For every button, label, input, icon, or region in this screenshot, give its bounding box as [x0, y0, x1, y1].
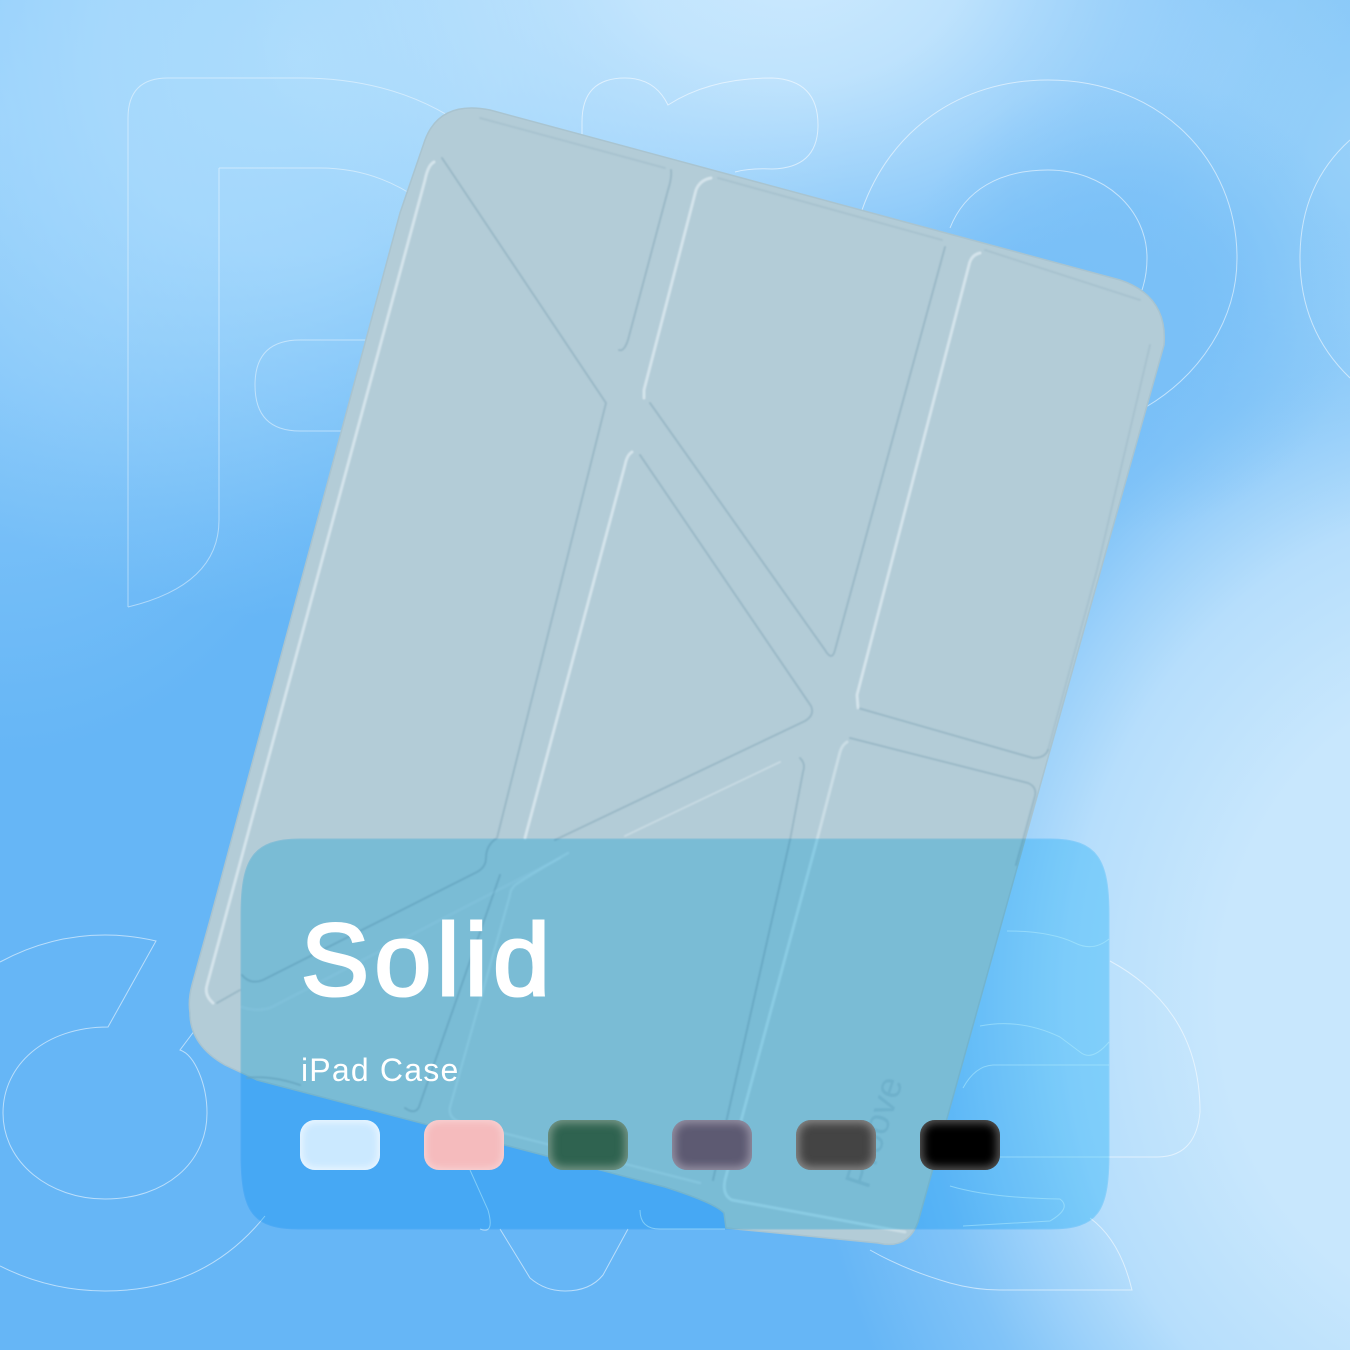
swatch: green [548, 1120, 628, 1170]
swatch: graphite [796, 1120, 876, 1170]
swatch: black [920, 1120, 1000, 1170]
outline letter a [470, 1170, 725, 1291]
colour swatches [300, 1120, 1000, 1170]
subheading: iPad Case: iPad Case [301, 1052, 459, 1088]
outline letter c [0, 935, 265, 1291]
swatch: purple [672, 1120, 752, 1170]
iPad case [189, 108, 1164, 1244]
embossed logo: Proove [837, 1071, 911, 1192]
outline letter next [1300, 140, 1350, 378]
heading: Solid: Solid [301, 903, 555, 1017]
outline letter o [862, 80, 1237, 407]
faint case rim seams [480, 118, 1150, 750]
case body [189, 108, 1164, 1244]
info panel [241, 839, 1109, 1229]
fold seams: highlights [206, 162, 980, 1232]
swatch: pink [424, 1120, 504, 1170]
outline letter e [870, 931, 1200, 1290]
outline letter r [582, 78, 818, 172]
swatch: light blue [300, 1120, 380, 1170]
outline letter P [128, 78, 470, 607]
fold seams: shadows [217, 118, 1150, 1192]
